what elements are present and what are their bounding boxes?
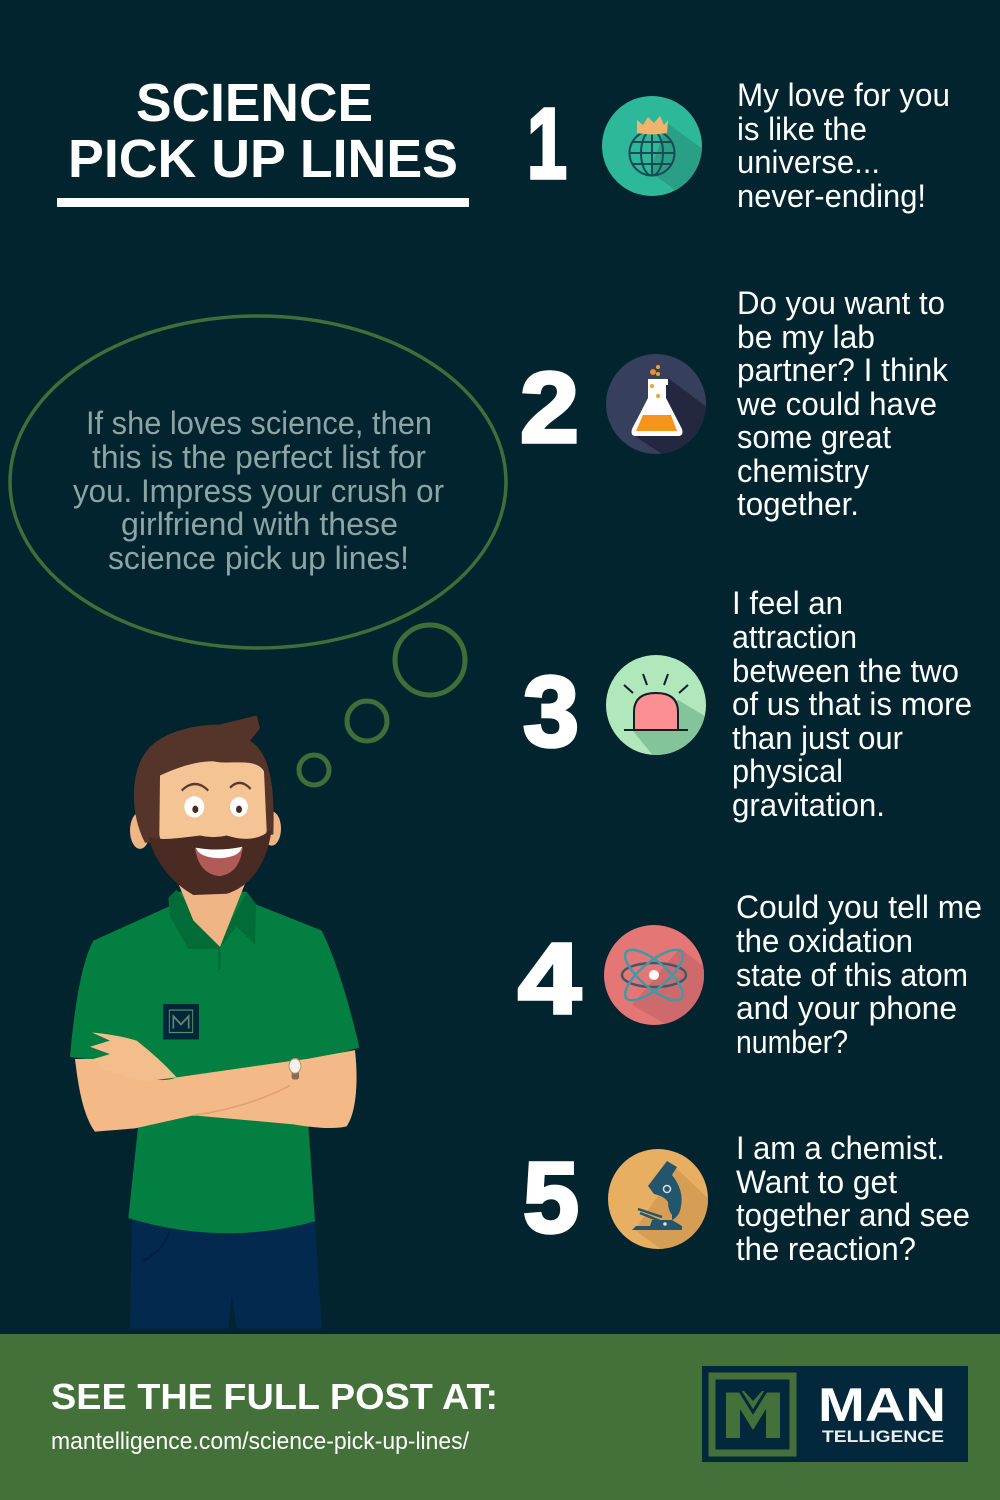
footer heading: SEE THE FULL POST AT: xyxy=(51,1376,498,1417)
logo xyxy=(702,1366,968,1462)
crossed arms xyxy=(75,1033,357,1132)
item 5 xyxy=(523,1130,970,1267)
footer url: mantelligence.com/science-pick-up-lines/ xyxy=(51,1428,469,1455)
item 1 xyxy=(527,77,950,214)
title xyxy=(57,73,469,207)
item 4: 4 xyxy=(518,923,581,1035)
item 4 xyxy=(518,889,982,1060)
face xyxy=(159,761,267,880)
title: PICK UP LINES xyxy=(68,129,458,189)
item 5: 5 xyxy=(523,1142,579,1254)
neck xyxy=(177,880,247,947)
item 3: attraction xyxy=(732,619,857,655)
item 3: gravitation. xyxy=(732,787,885,823)
item 3 xyxy=(523,585,972,823)
thought bubble: you. Impress your crush or xyxy=(73,473,444,509)
item 5: Want to get xyxy=(736,1164,897,1200)
footer band xyxy=(0,1334,1000,1500)
item 1: is like the xyxy=(737,111,867,147)
thought bubble: girlfriend with these xyxy=(121,506,398,542)
item 4: the oxidation xyxy=(736,923,913,959)
item 5: together and see xyxy=(736,1197,970,1233)
item 1: 1 xyxy=(527,88,567,200)
item 2: some great xyxy=(737,419,891,455)
item 3: 3 xyxy=(523,656,579,768)
item 5: I am a chemist. xyxy=(736,1130,945,1166)
thought bubble xyxy=(10,316,506,785)
thought bubble: If she loves science, then xyxy=(86,405,432,441)
logo: MAN xyxy=(818,1378,946,1431)
item 3: of us that is more xyxy=(732,686,972,722)
item 4: Could you tell me xyxy=(736,889,982,925)
icon: dome alarm light xyxy=(606,655,708,758)
beard xyxy=(148,829,272,895)
mouth xyxy=(195,847,243,876)
eyes xyxy=(182,783,251,818)
item 2: be my lab xyxy=(737,319,875,355)
character: bearded man in green polo xyxy=(70,716,359,1328)
item 2: we could have xyxy=(736,386,937,422)
title: SCIENCE xyxy=(136,73,373,133)
ears xyxy=(130,811,281,849)
thought bubble: this is the perfect list for xyxy=(92,439,426,475)
icon: microscope xyxy=(608,1149,710,1252)
item 1: My love for you xyxy=(737,77,950,113)
item 4: and your phone xyxy=(736,990,957,1026)
item 5: the reaction? xyxy=(736,1231,916,1267)
trousers xyxy=(130,1218,322,1328)
icon: atom xyxy=(604,925,708,1028)
item 2: Do you want to xyxy=(737,285,945,321)
item 4: number? xyxy=(736,1024,848,1060)
item 2: 2 xyxy=(520,352,579,464)
item 3: physical xyxy=(732,753,843,789)
logo: TELLIGENCE xyxy=(822,1427,944,1446)
thought bubble: science pick up lines! xyxy=(108,540,409,576)
item 1: never-ending! xyxy=(737,178,926,214)
polo shirt xyxy=(70,890,359,1233)
item 2: partner? I think xyxy=(737,352,949,388)
item 3: than just our xyxy=(732,720,903,756)
icon: chemistry flask xyxy=(606,354,708,456)
item 2: chemistry xyxy=(737,453,869,489)
hair xyxy=(134,716,274,843)
item 2 xyxy=(520,285,949,522)
item 1: universe... xyxy=(737,144,880,180)
wristwatch xyxy=(289,1058,301,1079)
item 2: together. xyxy=(737,486,859,522)
item 3: between the two xyxy=(732,653,959,689)
chest badge xyxy=(163,1004,199,1039)
icon: globe with crown xyxy=(602,96,704,196)
item 4: state of this atom xyxy=(736,957,968,993)
item 3: I feel an xyxy=(732,585,843,621)
